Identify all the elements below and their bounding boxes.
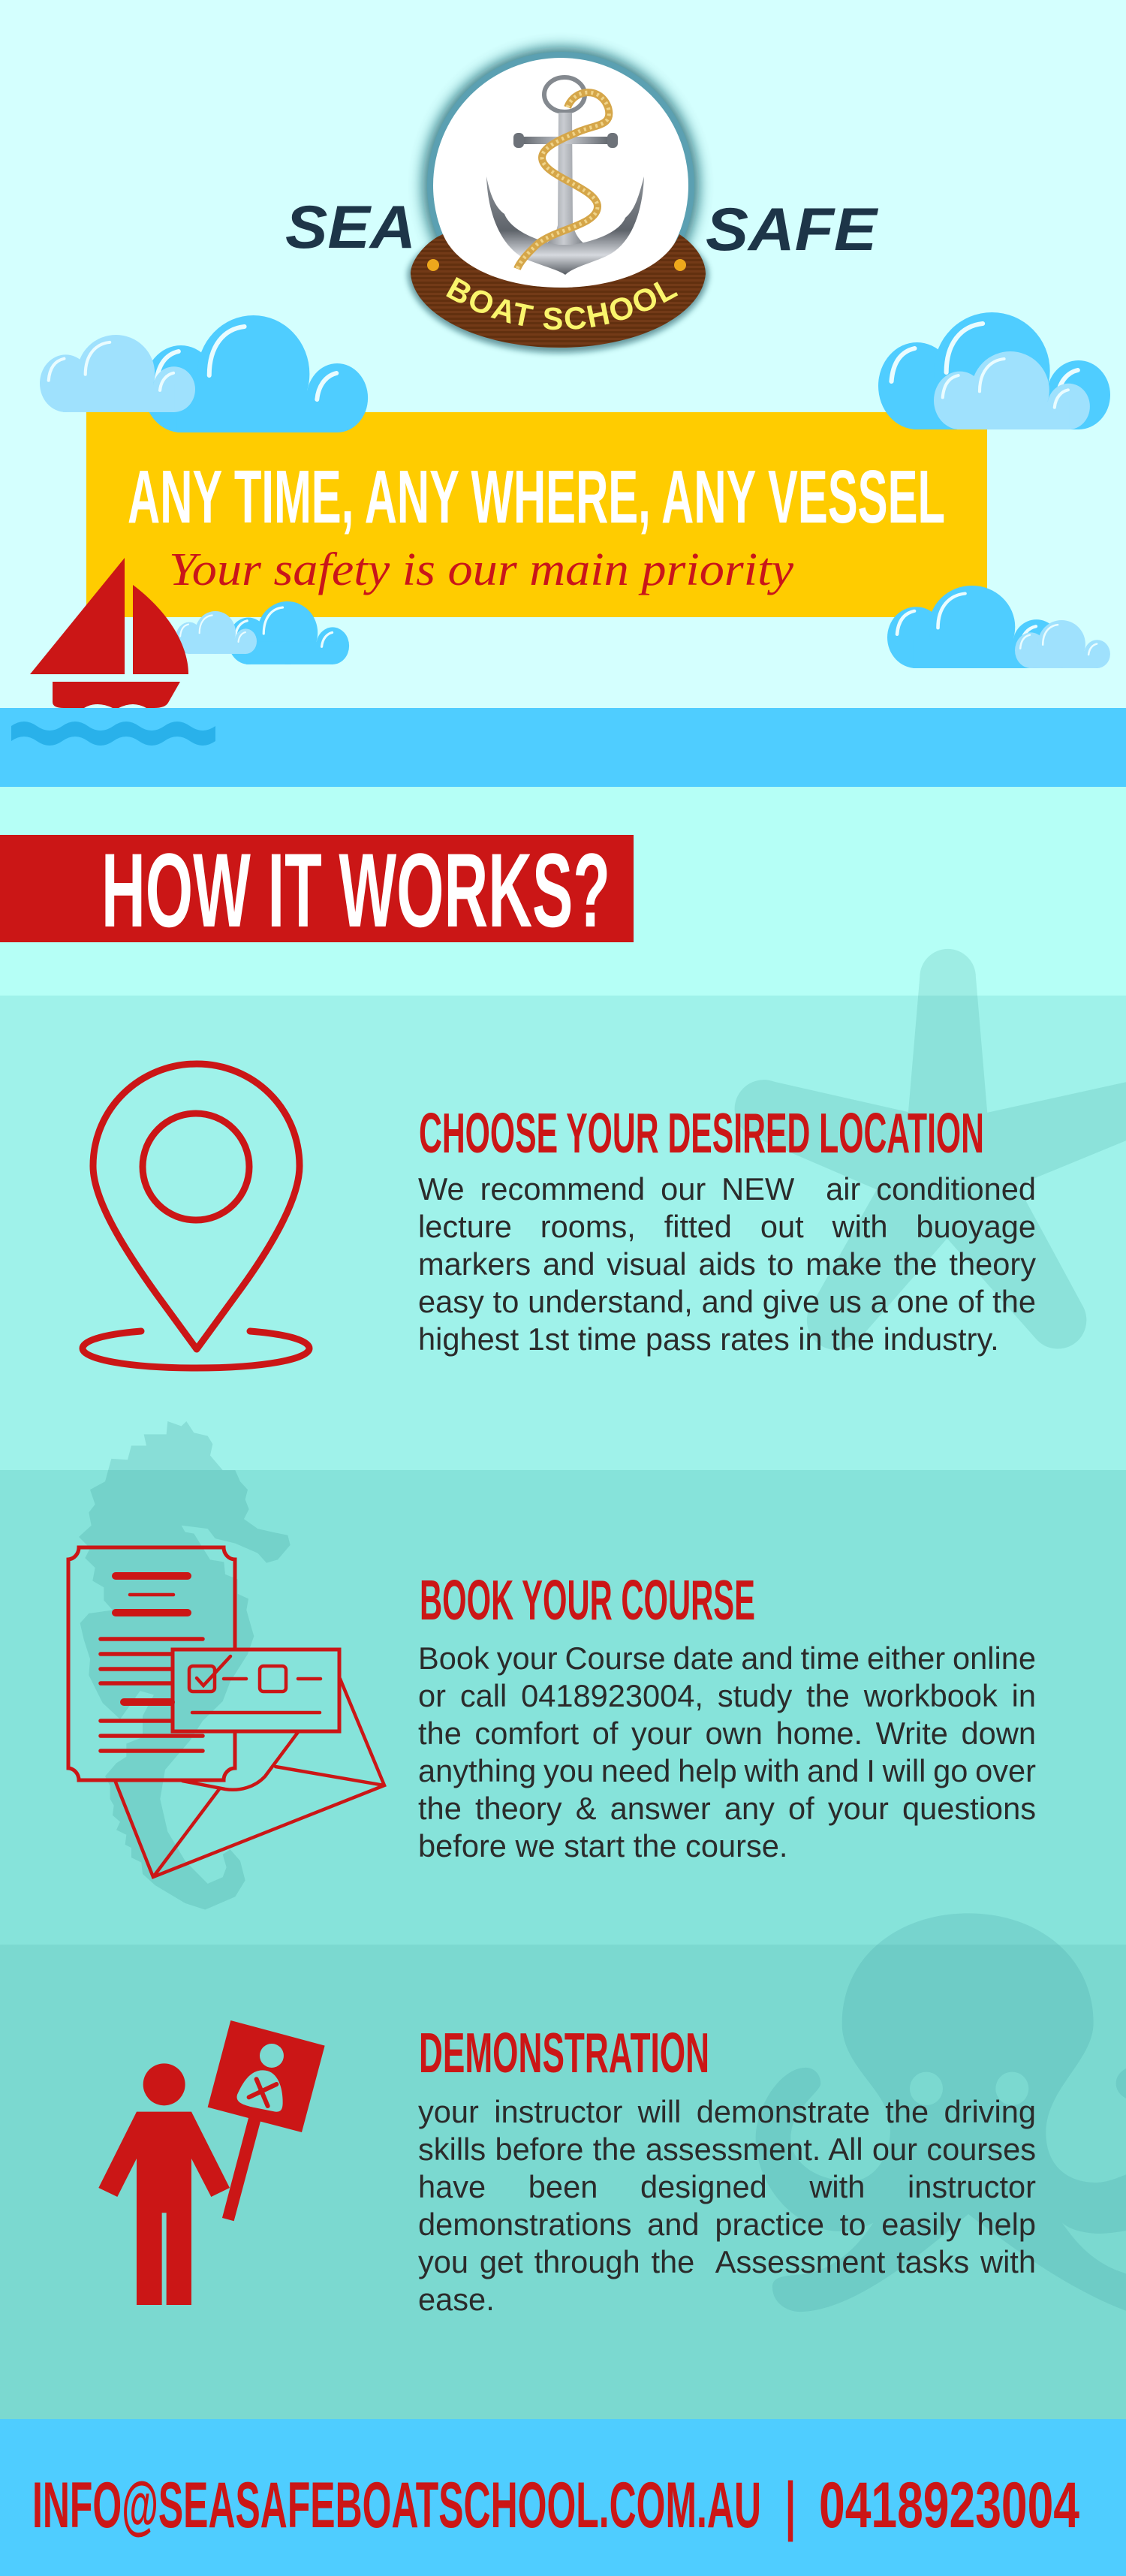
icon: light cloud lower left [176, 611, 257, 654]
text: book course description [418, 1641, 1036, 1863]
icon: cloud lower left [228, 601, 349, 664]
text: book course description: the comfort of your own home. Write down [418, 1716, 1036, 1751]
text: demonstration description [418, 2094, 1036, 2317]
text: demonstration description: have been designed with instructor [418, 2169, 1036, 2204]
sky background [0, 0, 1126, 708]
subheading: safety script: Your safety is our main priority [169, 544, 794, 595]
text: book course description: or call 0418923004, study the workbook in [418, 1678, 1036, 1713]
panel: demonstration background [0, 1945, 1126, 2419]
text: choose location description [418, 1171, 1036, 1357]
document lines [101, 1576, 203, 1751]
text: choose location description: lecture rooms, fitted out with buoyage [418, 1209, 1036, 1244]
heading: demonstration: DEMONSTRATION [419, 2021, 709, 2084]
logo [285, 37, 879, 357]
icon: anchor [486, 77, 644, 275]
text: book course description: anything you need help with and I will go over [418, 1753, 1036, 1788]
text: choose location description: We recommend our NEW air conditioned [418, 1171, 1036, 1207]
footer band [0, 2419, 1126, 2576]
text: demonstration description: demonstrations and practice to easily help [418, 2207, 1036, 2242]
background: seahorse [79, 1421, 291, 1910]
text: demonstration description: skills before the assessment. All our courses [418, 2132, 1036, 2167]
heading panel: how it works [0, 831, 634, 949]
text: book course description: before we start the course. [418, 1828, 787, 1863]
icon: light cloud top left [40, 335, 195, 412]
banner text: BOAT SCHOOL [446, 277, 679, 330]
icon: light cloud top right [934, 351, 1090, 429]
icon: sailboat [30, 558, 188, 708]
envelope [115, 1679, 384, 1877]
banner: tagline panel [86, 412, 987, 617]
light water background [0, 787, 1126, 996]
wordmark: SEA: SEA [285, 194, 416, 261]
footer contact text: | [785, 2469, 796, 2541]
checklist card [173, 1650, 339, 1731]
panel: choose location background [0, 996, 1126, 1470]
text: demonstration description: ease. [418, 2282, 495, 2317]
text: demonstration description: your instructor will demonstrate the driving [418, 2094, 1036, 2129]
icon: form and envelope [68, 1547, 384, 1877]
text: choose location description: markers and visual aids to make the theory [418, 1246, 1036, 1282]
background: octopus [756, 1913, 1126, 2319]
wordmark: SAFE: SAFE [706, 196, 879, 264]
background: starfish [735, 949, 1126, 1350]
icon: person holding sign [98, 2020, 325, 2305]
document outline [68, 1547, 235, 1780]
icon: waves [11, 722, 215, 746]
text: choose location description: highest 1st time pass rates in the industry. [418, 1321, 999, 1357]
icon: cloud top left [143, 315, 368, 432]
sea band [0, 708, 1126, 787]
icon: light cloud lower right [1015, 620, 1110, 668]
icon: location pin [83, 1064, 309, 1368]
icon: cloud lower right [887, 586, 1060, 668]
icon: cloud top right [878, 312, 1110, 429]
text: book course description: the theory & answer any of your questions [418, 1791, 1036, 1826]
text: book course description: Book your Course date and time either online [418, 1641, 1036, 1676]
heading text: HOW IT WORKS? [101, 831, 610, 949]
panel: book course background [0, 1470, 1126, 1945]
text: demonstration description: you get through the Assessment tasks with [418, 2244, 1036, 2279]
ribbon banner [410, 234, 706, 348]
heading: book course: BOOK YOUR COURSE [420, 1568, 755, 1631]
text: choose location description: easy to understand, and give us a one of the [418, 1284, 1036, 1319]
